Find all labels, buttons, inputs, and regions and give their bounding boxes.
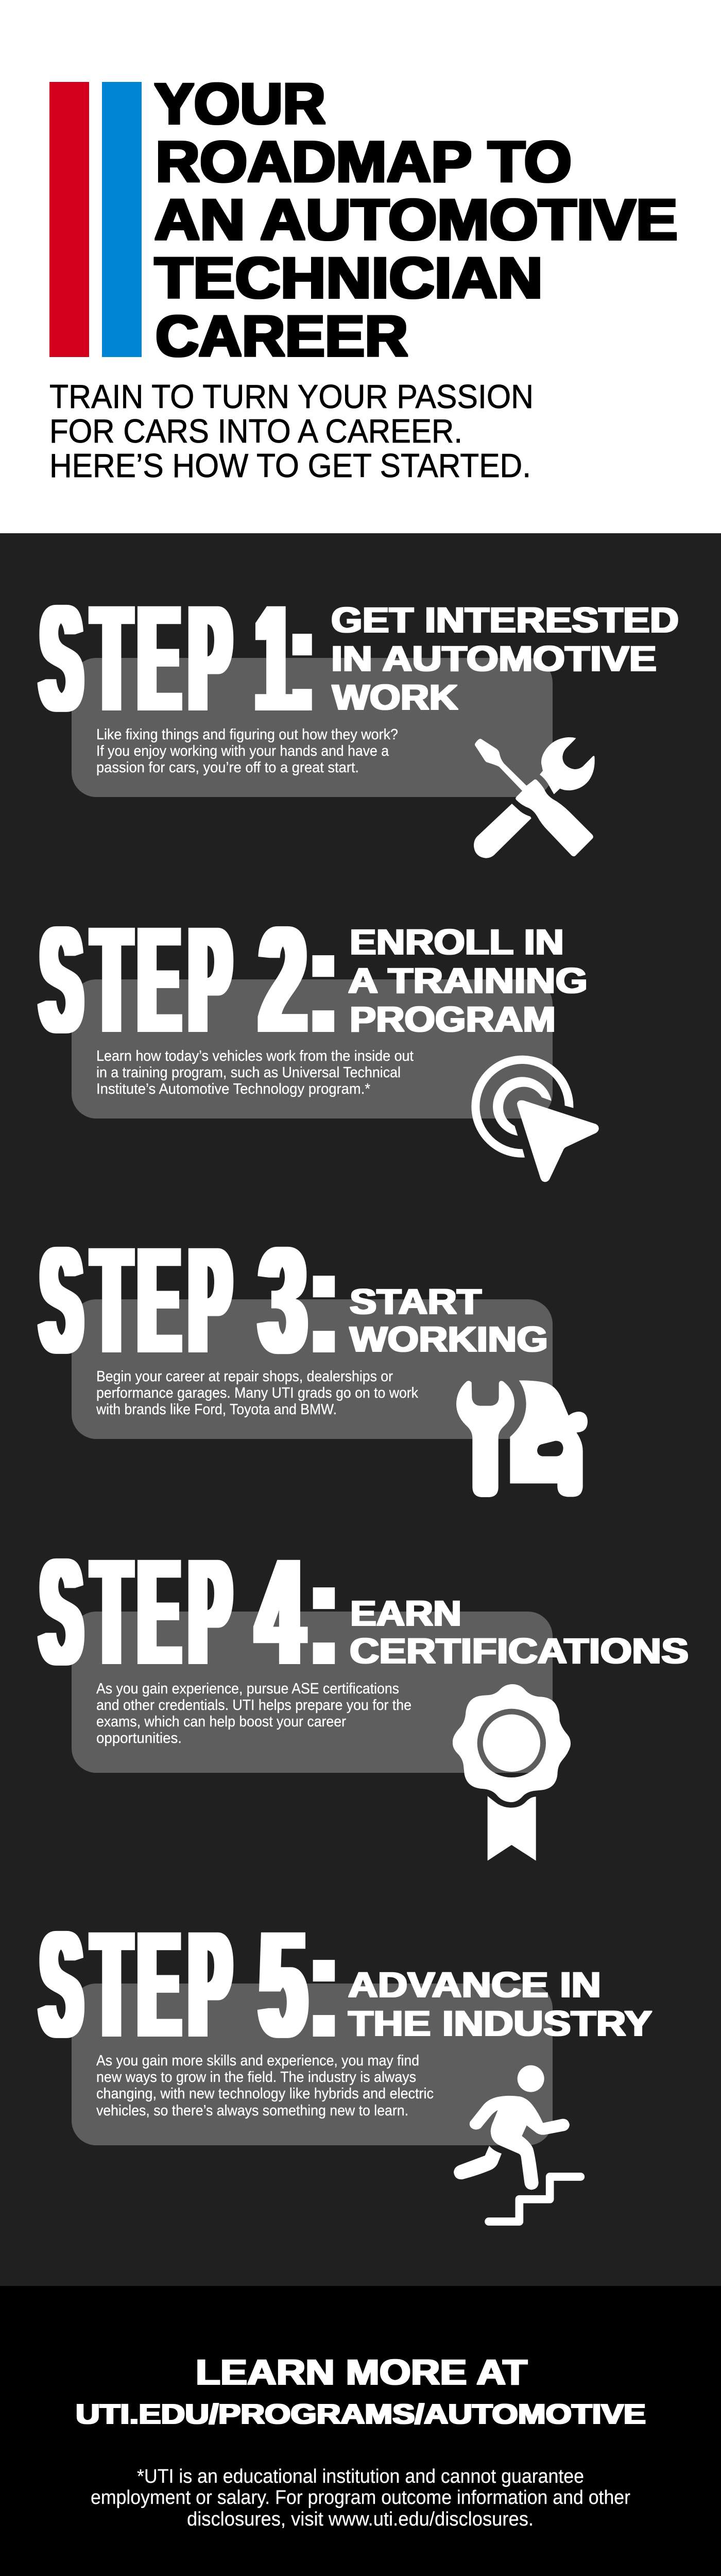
heading: WORKING xyxy=(350,1319,548,1359)
body text: Like fixing things and figuring out how they work? xyxy=(96,726,398,743)
call to action: UTI.EDU/PROGRAMS/AUTOMOTIVE xyxy=(76,2399,646,2430)
heading: ENROLL IN xyxy=(350,922,564,962)
panel: step 4 xyxy=(41,1528,689,1861)
body text: new ways to grow in the field. The industry is always xyxy=(96,2069,416,2086)
body text: Begin your career at repair shops, dealerships or xyxy=(96,1368,393,1385)
icon: wrench and car xyxy=(456,1380,588,1497)
card xyxy=(72,979,553,1118)
heading: THE INDUSTRY xyxy=(348,2004,652,2043)
heading: EARN xyxy=(350,1594,461,1633)
icon: wrench and screwdriver xyxy=(474,737,595,858)
heading xyxy=(331,600,679,717)
step number: STEP xyxy=(41,1217,230,1384)
card xyxy=(72,1612,553,1773)
panel: step 5 xyxy=(41,1900,652,2222)
body text xyxy=(96,726,398,776)
heading: A TRAINING xyxy=(348,961,588,1001)
body text xyxy=(96,2053,434,2119)
title: ROADMAP TO xyxy=(156,130,572,194)
disclaimer: employment or salary. For program outcome information and other xyxy=(91,2487,630,2509)
subtitle xyxy=(49,378,534,484)
panel: step 3 xyxy=(41,1216,588,1497)
heading xyxy=(348,1965,652,2043)
body text: in a training program, such as Universal Technical xyxy=(96,1064,401,1081)
panel: step 1 xyxy=(41,574,679,858)
body text: exams, which can help boost your career xyxy=(96,1714,346,1730)
panel: white header xyxy=(0,0,721,533)
disclaimer: disclosures, visit www.uti.edu/disclosures. xyxy=(187,2509,534,2530)
body text: If you enjoy working with your hands and have a xyxy=(96,743,389,759)
icon: rosette ribbon xyxy=(453,1684,571,1861)
panel: step 2 xyxy=(41,895,599,1182)
step number: 2: xyxy=(260,895,337,1063)
step number xyxy=(41,574,313,742)
title: CAREER xyxy=(156,304,408,368)
panel: dark steps background xyxy=(0,533,721,2286)
heading: IN AUTOMOTIVE xyxy=(331,639,657,679)
step number xyxy=(41,895,337,1064)
step number: 5: xyxy=(260,1900,338,2068)
heading: START xyxy=(350,1282,482,1321)
icon: person climbing stairs xyxy=(454,2065,580,2222)
call to action xyxy=(76,2352,646,2430)
body text: vehicles, so there’s always something new to learn. xyxy=(96,2103,408,2119)
icon: click target cursor xyxy=(471,1056,599,1182)
step number: 1: xyxy=(256,574,313,742)
card xyxy=(72,1299,553,1439)
body text: Institute’s Automotive Technology program.* xyxy=(96,1081,370,1097)
panel: footer xyxy=(0,2286,721,2576)
body text xyxy=(96,1368,418,1418)
heading: WORK xyxy=(332,677,458,717)
blue stripe xyxy=(102,82,142,357)
step number: STEP xyxy=(41,1529,230,1696)
title xyxy=(154,72,678,368)
red stripe xyxy=(49,82,89,357)
step number xyxy=(41,1528,338,1696)
card xyxy=(72,658,553,797)
body text: passion for cars, you’re off to a great start. xyxy=(96,759,359,776)
body text xyxy=(96,1048,414,1097)
body text: performance garages. Many UTI grads go on to work xyxy=(96,1385,418,1401)
call to action: LEARN MORE AT xyxy=(196,2352,527,2392)
title: AN AUTOMOTIVE xyxy=(154,188,678,252)
heading xyxy=(350,1282,548,1359)
subtitle: HERE’S HOW TO GET STARTED. xyxy=(49,447,531,484)
step number: STEP xyxy=(41,1901,230,2069)
subtitle: TRAIN TO TURN YOUR PASSION xyxy=(49,378,534,415)
step number xyxy=(41,1216,338,1384)
title: YOUR xyxy=(154,72,325,136)
subtitle: FOR CARS INTO A CAREER. xyxy=(49,412,462,450)
body text: Learn how today’s vehicles work from the inside out xyxy=(96,1048,414,1064)
step number: STEP xyxy=(41,896,230,1064)
body text: changing, with new technology like hybrids and electric xyxy=(96,2086,434,2102)
body text: with brands like Ford, Toyota and BMW. xyxy=(96,1401,337,1418)
step number: 4: xyxy=(257,1528,338,1696)
card xyxy=(72,1984,553,2145)
disclaimer xyxy=(91,2466,630,2530)
step number: STEP xyxy=(41,575,230,742)
body text: opportunities. xyxy=(96,1730,182,1747)
body text xyxy=(96,1681,411,1747)
body text: and other credentials. UTI helps prepare you for the xyxy=(96,1697,411,1714)
step number: 3: xyxy=(260,1216,338,1384)
step number xyxy=(41,1900,338,2069)
heading: ADVANCE IN xyxy=(348,1965,601,2005)
heading xyxy=(350,1594,689,1671)
heading xyxy=(348,922,588,1039)
heading: CERTIFICATIONS xyxy=(350,1631,689,1671)
title: TECHNICIAN xyxy=(154,246,543,310)
heading: PROGRAM xyxy=(350,999,556,1039)
disclaimer: *UTI is an educational institution and cannot guarantee xyxy=(137,2466,584,2487)
heading: GET INTERESTED xyxy=(331,600,679,640)
body text: As you gain experience, pursue ASE certifications xyxy=(96,1681,399,1697)
body text: As you gain more skills and experience, you may find xyxy=(96,2053,419,2069)
